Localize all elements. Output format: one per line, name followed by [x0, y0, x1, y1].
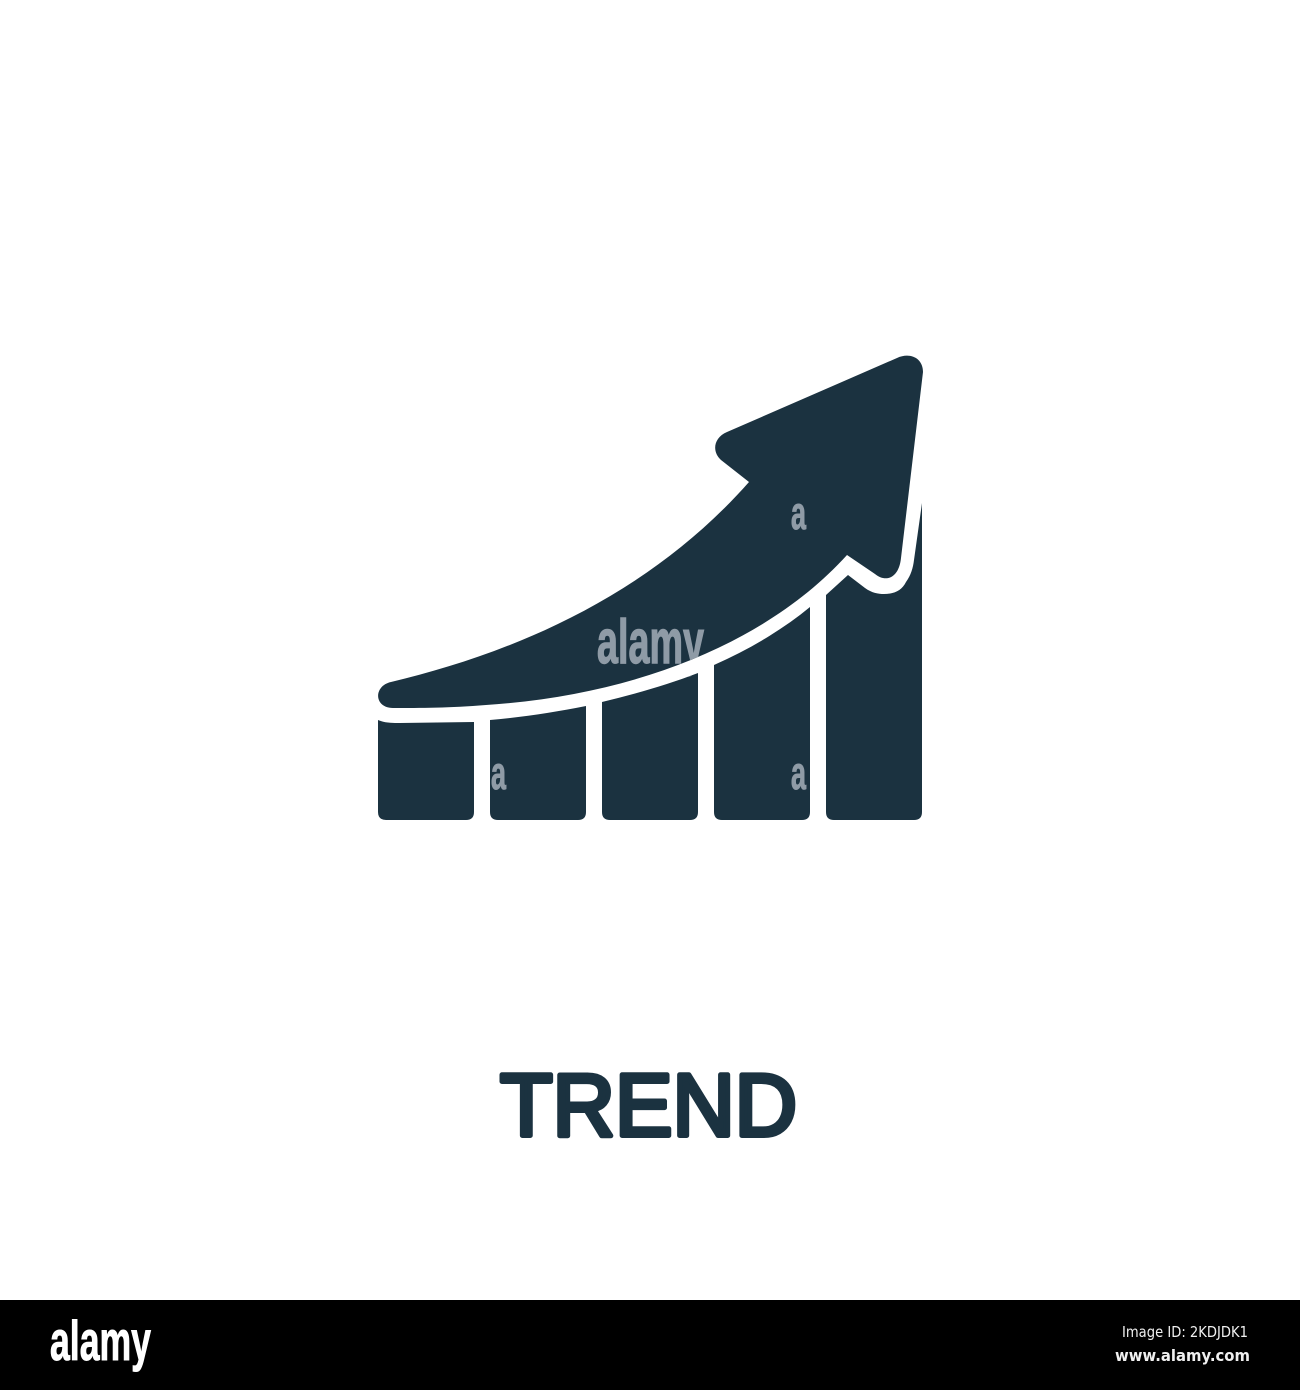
footer logo: alamy: alamy	[50, 1309, 151, 1372]
bar 4	[714, 607, 810, 820]
bar 1	[378, 720, 474, 820]
bar 2	[490, 706, 586, 820]
bar 5	[826, 503, 922, 820]
watermark: letter a lower left: a	[491, 747, 506, 799]
bar 3	[602, 673, 698, 820]
watermark: alamy centre: alamy	[597, 608, 704, 677]
icon: rising arrow	[378, 356, 923, 708]
icon: trend chart with rising arrow	[378, 356, 923, 820]
footer url: www.alamy.com	[1115, 1346, 1250, 1365]
watermark: letter a lower right: a	[791, 747, 806, 799]
watermark: letter a upper: a	[791, 487, 806, 539]
footer bar	[0, 1300, 1300, 1390]
footer image id: Image ID: 2KDJDK1	[1122, 1323, 1248, 1341]
title: TREND: TREND	[500, 1056, 797, 1154]
